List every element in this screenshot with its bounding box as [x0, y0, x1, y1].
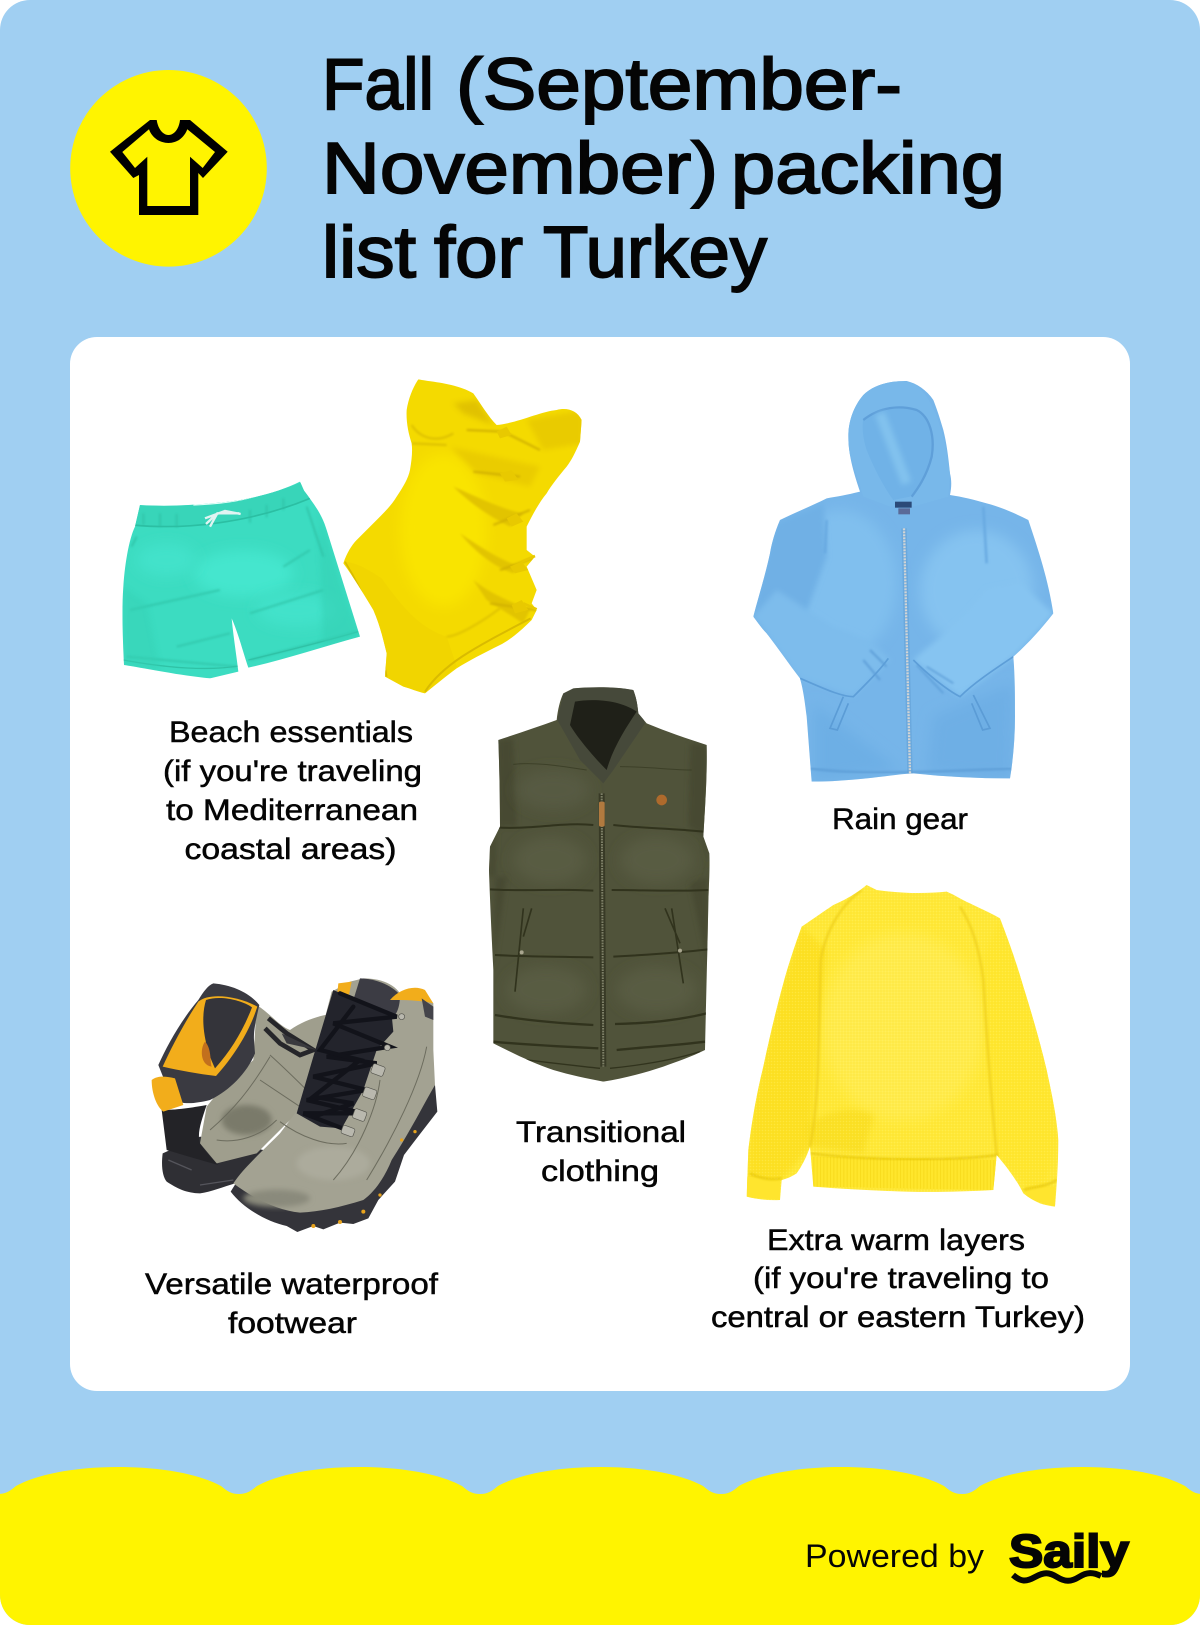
icon: yellow swimsuit	[337, 373, 590, 700]
footer wave band	[0, 1467, 1200, 1625]
title: for	[434, 213, 523, 293]
title: list	[322, 213, 416, 293]
title: packing	[731, 129, 1005, 209]
icon: blue rain jacket	[753, 381, 1054, 782]
label: extra warm layers: central or eastern Turkey)	[711, 1301, 1085, 1334]
footer: powered by Saily logo: Powered by	[805, 1538, 984, 1574]
label: versatile waterproof footwear: Versatile waterproof	[145, 1268, 439, 1301]
label: rain gear: Rain gear	[832, 803, 968, 836]
label: beach essentials	[163, 716, 422, 866]
icon: swim shorts	[122, 482, 360, 678]
label: transitional clothing: Transitional	[516, 1116, 686, 1149]
label: extra warm layers: (if you're traveling to	[753, 1262, 1049, 1295]
left boot	[152, 983, 340, 1193]
label: beach essentials: (if you're traveling	[163, 755, 422, 788]
title: Fall	[322, 45, 434, 125]
panel: packing items	[70, 337, 1130, 1391]
label: versatile waterproof footwear: footwear	[228, 1307, 357, 1340]
icon: green puffer vest	[483, 683, 717, 1087]
label: extra warm layers: Extra warm layers	[767, 1224, 1025, 1257]
icon: hiking boots	[152, 978, 437, 1232]
footer: powered by Saily logo	[805, 1525, 1129, 1581]
title	[322, 45, 1005, 293]
label: extra warm layers	[711, 1224, 1085, 1334]
label: versatile waterproof footwear	[145, 1268, 439, 1340]
title: Turkey	[543, 213, 767, 293]
icon: yellow sweater	[740, 880, 1067, 1213]
title: (September-	[456, 45, 902, 125]
title: November)	[322, 129, 718, 209]
label: beach essentials: coastal areas)	[184, 833, 396, 866]
label: beach essentials: to Mediterranean	[166, 794, 418, 827]
label: beach essentials: Beach essentials	[169, 716, 413, 749]
icon: t-shirt in yellow circle	[70, 70, 267, 267]
label: transitional clothing: clothing	[541, 1155, 659, 1188]
right boot	[231, 978, 437, 1232]
footer: powered by Saily logo: Saily	[1009, 1525, 1129, 1577]
label: transitional clothing	[516, 1116, 686, 1188]
